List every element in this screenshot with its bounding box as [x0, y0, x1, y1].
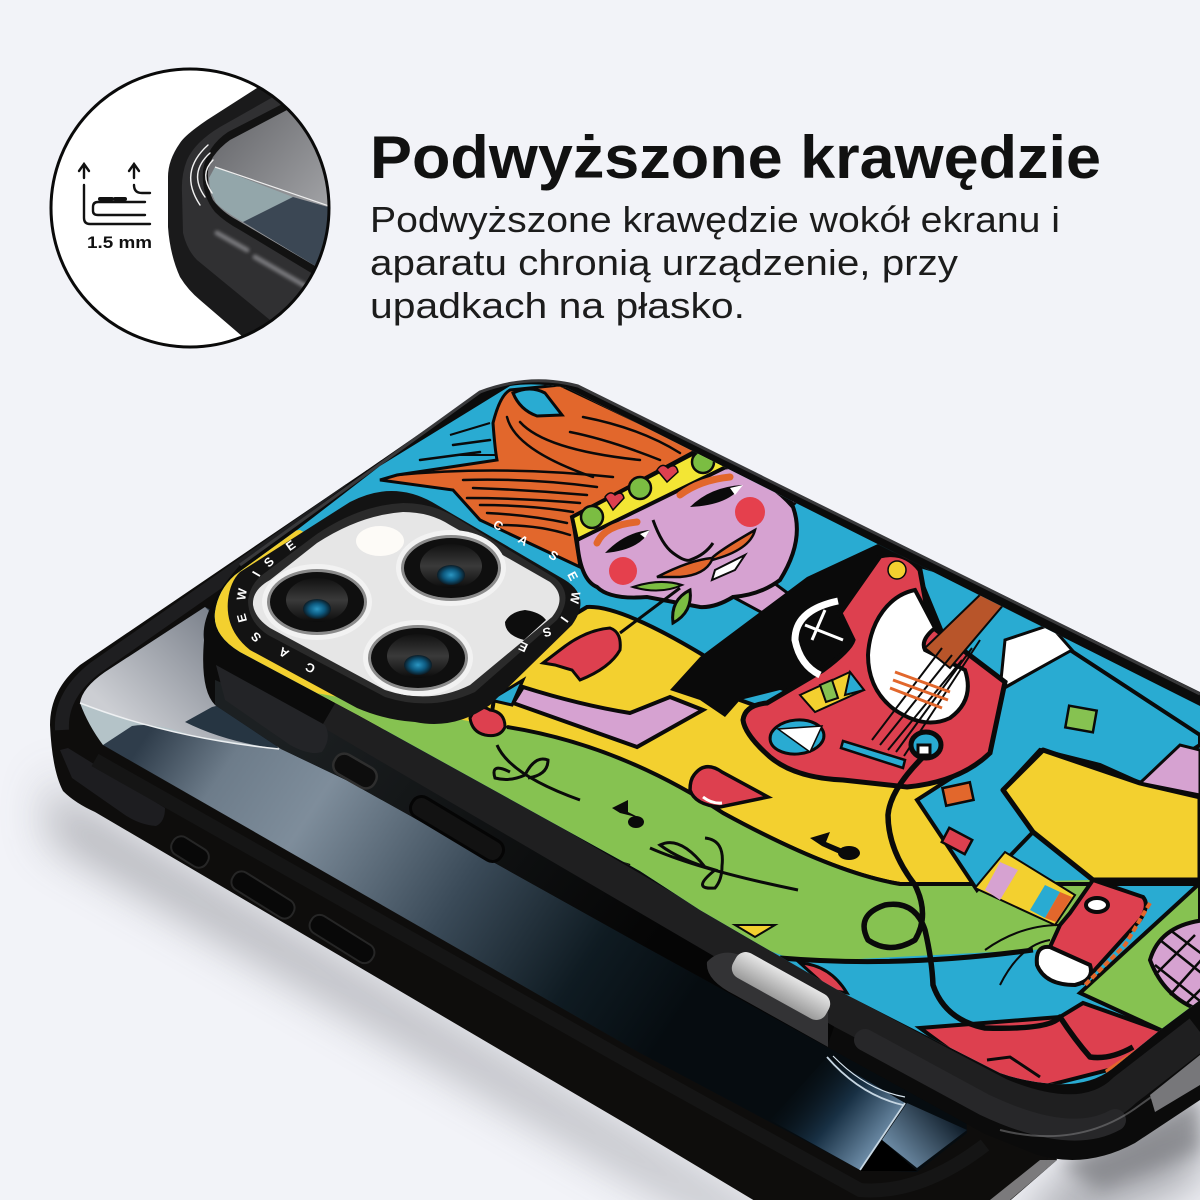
art background: blue: [200, 370, 1200, 1100]
camera ring brand lettering: E: [564, 569, 581, 583]
rear bottom corner edge: [990, 1160, 1057, 1200]
front case underside: [215, 680, 840, 1047]
art: guitar cable: [864, 757, 1133, 1058]
art: music notes: [612, 800, 860, 860]
front left grey patch: [216, 665, 328, 753]
camera ring brand lettering: E: [283, 538, 298, 554]
description text: Podwyższone krawędzie wokół ekranu i: [370, 199, 1060, 240]
rear screen wave: [80, 703, 279, 749]
front phone: [200, 370, 1200, 1190]
charging port: [707, 948, 834, 1047]
art: rose stem and leaves: [620, 582, 690, 633]
camera ring brand lettering: A: [516, 532, 531, 549]
description text: [370, 199, 1060, 326]
rear side buttons: [168, 833, 378, 967]
art: fishnet shape: [1150, 920, 1200, 1012]
art: sprigs: [494, 745, 798, 890]
art: yellow body: [490, 607, 990, 890]
title: Podwyższone krawędzie: [370, 124, 1101, 191]
camera ring brand lettering: I: [250, 569, 263, 579]
camera ring brand lettering: W: [567, 591, 583, 605]
camera bump: [228, 491, 583, 724]
art: patches: [942, 706, 1097, 854]
measurement label: 1.5 mm: [87, 234, 152, 252]
art: upper right leg: [1140, 745, 1200, 795]
art: smiley badge: [888, 561, 906, 579]
rear screen upper light area: [80, 607, 300, 749]
lens: left: [262, 564, 372, 640]
art: small red and yellow tips: [605, 857, 775, 937]
side button: [407, 793, 507, 865]
art: peace symbol: [795, 601, 843, 675]
art: teeth: [712, 555, 745, 580]
art: cheeks: [609, 497, 765, 585]
description text: aparatu chronią urządzenie, przy: [370, 242, 958, 283]
front case body: [203, 380, 1200, 1160]
art: coloured badge: [800, 672, 864, 712]
art: black hair mass: [670, 544, 1035, 717]
camera ring brand lettering: C: [303, 659, 317, 676]
art: guitar bridge bar: [841, 741, 905, 768]
art: heart: [690, 767, 768, 807]
camera ring brand lettering: [234, 517, 583, 676]
art: red bottom: [920, 1003, 1165, 1090]
front rim lower band: [330, 712, 1200, 1111]
camera ring brand lettering: S: [546, 548, 561, 564]
rear case: [50, 470, 1057, 1200]
rear screen dark swoosh: [185, 700, 279, 749]
art: striped sock: [975, 852, 1075, 925]
art: eyes: [605, 485, 743, 553]
circular inset: raised edge detail: [51, 69, 345, 347]
lens: top right: [396, 530, 506, 606]
art: sleeve: [1000, 625, 1072, 690]
art: lower-left yellow: [214, 530, 492, 730]
art: head: [577, 467, 797, 607]
art: large tulip: [543, 628, 620, 680]
silent switch: [330, 750, 380, 792]
camera ring brand lettering: A: [276, 644, 291, 661]
silver grille side: [1150, 1055, 1200, 1112]
rear screen: [80, 607, 967, 1172]
art: orange corner: [1105, 1048, 1138, 1073]
camera ring brand lettering: I: [558, 614, 571, 625]
icon: raised edge diagram: [79, 164, 150, 224]
camera ring brand lettering: S: [248, 629, 264, 645]
camera ring brand lettering: W: [234, 587, 250, 601]
front rim top edge: [240, 381, 1200, 694]
art: yellow block: [1003, 750, 1200, 880]
art: guitar neck: [872, 590, 1005, 756]
art: nose line: [653, 520, 713, 560]
camera ring: [228, 491, 581, 724]
right side shadow: [1060, 1095, 1200, 1190]
description text: upadkach na płasko.: [370, 285, 745, 326]
rim highlight: [1000, 1062, 1200, 1136]
camera ring brand lettering: E: [517, 639, 530, 655]
phone artwork: [200, 370, 1200, 1100]
rear screen blue light art: [770, 1056, 967, 1171]
rear case rim highlight: [62, 490, 350, 730]
camera ring brand lettering: E: [234, 612, 250, 624]
flash: [356, 526, 404, 556]
art: head right detail: [789, 500, 796, 506]
rear case lower-left grey patch: [60, 748, 165, 826]
art: round badge: [769, 718, 825, 756]
art: blue behind neck: [915, 565, 1060, 680]
art: red corner lower-left: [800, 963, 847, 993]
drop shadow: [50, 770, 1200, 1200]
camera inner bezel: [248, 503, 566, 703]
art: arm: [513, 687, 703, 747]
art: cuff: [490, 680, 523, 705]
art: small tulip: [470, 707, 505, 736]
camera ring brand lettering: C: [491, 517, 506, 534]
rear phone: [50, 470, 1057, 1200]
rear bottom rim: [95, 760, 985, 1190]
art: headband: [572, 450, 730, 540]
camera ring brand lettering: S: [261, 554, 277, 570]
art: hair: [380, 385, 697, 567]
lens: bottom: [363, 620, 473, 696]
art: green field: [300, 690, 1090, 962]
art: guitar body: [743, 555, 1005, 787]
inset phone corner: [168, 88, 328, 336]
art: pickguard: [868, 590, 968, 722]
art: shoe: [985, 880, 1150, 985]
art: neck: [734, 584, 788, 613]
camera glass: [253, 512, 560, 696]
camera ring brand lettering: S: [541, 624, 553, 640]
art: green block right: [1080, 883, 1200, 1032]
art: jack: [911, 732, 941, 758]
lidar: [505, 610, 546, 640]
art: mustache: [657, 530, 755, 577]
art: jacket: [917, 650, 1200, 890]
art: eyebrows: [597, 477, 730, 543]
